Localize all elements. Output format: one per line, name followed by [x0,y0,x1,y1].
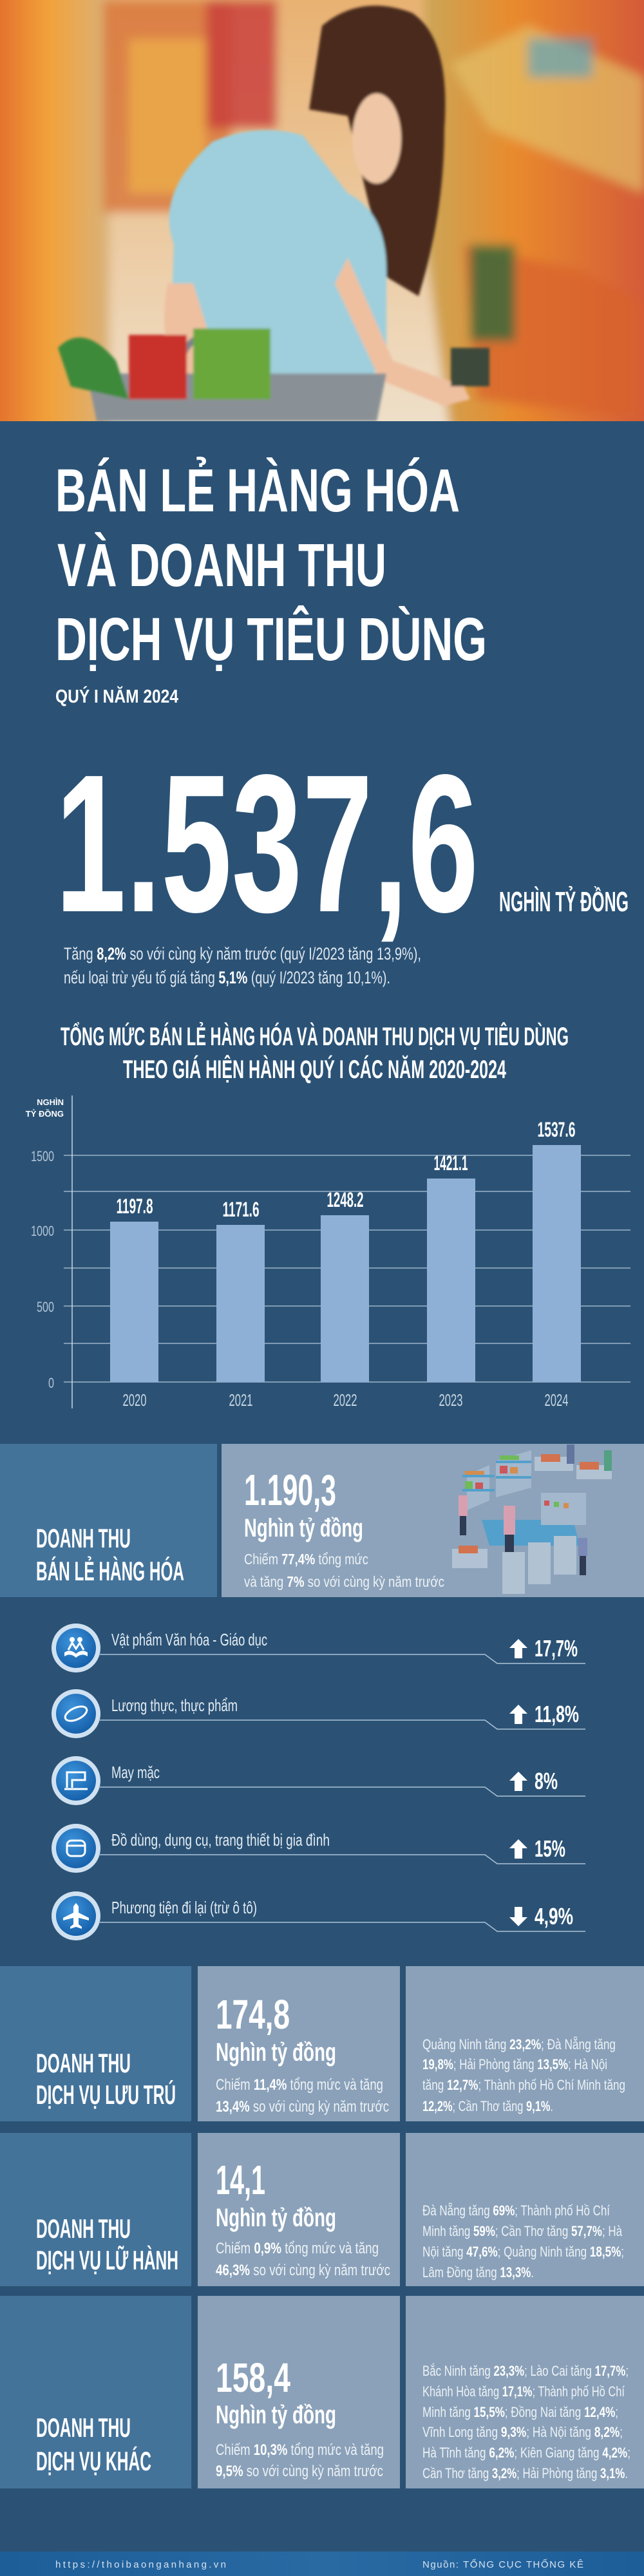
panel: accommodation services: DOANH THU [36,2048,131,2078]
y tick labels: 0 [48,1375,54,1391]
year labels: 2022 [334,1390,357,1410]
panel: retail header [0,1444,644,1597]
panel: accommodation services: 12,2%; Cần Thơ tăng 9,1%. [422,2098,553,2114]
panel: travel services: Nghìn tỷ đồng [216,2204,336,2232]
year labels: 2020 [122,1390,147,1410]
panel: travel services: Đà Nẵng tăng 69%; Thành phố Hồ Chí [422,2202,610,2219]
panel: accommodation services [0,1966,644,2121]
heading: retail [36,1523,184,1586]
item: food: Lương thực, thực phẩm [111,1696,238,1715]
panel: other services: Bắc Ninh tăng 23,3%; Lào Cai tăng 17,7%; [422,2363,629,2379]
y tick labels: 500 [37,1299,54,1315]
year labels [122,1390,568,1410]
list: retail categories [52,1624,585,1940]
item: household goods: 15% [535,1835,565,1862]
panel: accommodation services: 19,8%; Hải Phòng tăng 13,5%; Hà Nội [422,2056,607,2072]
y tick labels: 1000 [31,1223,54,1239]
panel: travel services [0,2133,644,2286]
panel: travel services: 46,3% so với cùng kỳ năm trước [216,2262,390,2279]
value labels: 1537.6 [537,1118,576,1141]
retail figure: và tăng 7% so với cùng kỳ năm trước [244,1573,444,1590]
y-axis unit: NGHÌN [37,1097,64,1107]
value labels: 1171.6 [223,1198,259,1221]
title: VÀ DOANH THU [57,531,386,600]
retail figure [244,1466,444,1590]
value labels: 1421.1 [434,1151,468,1175]
item: cultural & educational goods: Vật phẩm Văn hóa - Giáo dục [111,1630,267,1649]
year labels: 2021 [229,1390,252,1410]
panel: other services: Vĩnh Long tăng 9,3%; Hà Nội tăng 8,2%; [422,2424,623,2440]
dress [167,128,390,375]
retail figure: Chiếm 77,4% tổng mức [244,1551,368,1567]
panel: accommodation services: 13,4% so với cùng kỳ năm trước [216,2098,389,2116]
item: vehicles [52,1891,585,1940]
chart title [61,1021,569,1084]
panel: travel services: Minh tăng 59%; Cần Thơ tăng 57,7%; Hà [422,2223,623,2239]
y tick labels [31,1148,54,1391]
growth note: Tăng 8,2% so với cùng kỳ năm trước (quý I/2023 tăng 13,9%), [64,944,421,963]
panel: travel services: Nội tăng 47,6%; Quảng Ninh tăng 18,5%; [422,2244,624,2260]
item: food [52,1689,585,1738]
panel: other services: Minh tăng 15,5%; Đồng Nai tăng 12,4%; [422,2404,618,2420]
item: cultural & educational goods: 17,7% [535,1635,578,1662]
retail figure: Nghìn tỷ đồng [244,1514,363,1542]
y-axis unit [26,1097,64,1119]
panel: other services: Nghìn tỷ đồng [216,2401,336,2429]
panel: travel services: DOANH THU [36,2213,131,2244]
title: DỊCH VỤ TIÊU DÙNG [55,605,487,674]
growth note: nếu loại trừ yếu tố giá tăng 5,1% (quý I/2023 tăng 10,1%). [64,968,390,987]
heading: retail: BÁN LẺ HÀNG HÓA [36,1555,184,1586]
panel: accommodation services: Nghìn tỷ đồng [216,2038,336,2067]
panel: other services: DỊCH VỤ KHÁC [36,2446,151,2476]
retail figure: 1.190,3 [244,1466,336,1515]
panel: travel services: 14,1 [216,2157,265,2203]
panel: accommodation services: Chiếm 11,4% tổng mức và tăng [216,2076,383,2094]
value labels [116,1118,576,1221]
footer: Nguồn: TỔNG CỤC THỐNG KÊ [422,2559,583,2570]
hair [309,6,445,296]
face [352,93,401,184]
footer [0,2552,644,2576]
title [55,457,487,674]
year labels: 2023 [439,1390,462,1410]
item: clothing: May mặc [111,1763,160,1782]
y tick labels: 1500 [31,1148,54,1164]
y-axis unit: TỶ ĐỒNG [26,1109,64,1119]
value labels: 1197.8 [116,1195,153,1218]
item: clothing: 8% [535,1768,558,1794]
panel: other services [0,2296,644,2488]
panel: accommodation services: DỊCH VỤ LƯU TRÚ [36,2079,176,2110]
item: cultural & educational goods [52,1624,585,1672]
panel: other services: Hà Tĩnh tăng 6,2%; Kiên Giang tăng 4,2%; [422,2445,630,2461]
item: vehicles: 4,9% [535,1903,573,1929]
panel: accommodation services: Quảng Ninh tăng 23,2%; Đà Nẵng tăng [422,2036,616,2052]
bar chart [26,1095,630,1410]
panel: other services: Chiếm 10,3% tổng mức và tăng [216,2441,384,2459]
item: vehicles: Phương tiện đi lại (trừ ô tô) [111,1898,257,1917]
illustration: store [452,1444,612,1594]
item: clothing [52,1756,585,1805]
item: household goods: Đồ dùng, dụng cụ, trang thiết bị gia đình [111,1830,330,1850]
bars [110,1145,581,1382]
footer: https://thoibaonganhang.vn [55,2559,226,2570]
title: BÁN LẺ HÀNG HÓA [55,457,460,525]
panel: other services: DOANH THU [36,2412,131,2443]
subtitle: QUÝ I NĂM 2024 [55,685,178,707]
panel: other services: 158,4 [216,2354,290,2401]
heading: retail: DOANH THU [36,1523,131,1553]
photo: woman shopping in supermarket [0,0,644,438]
panel: travel services: DỊCH VỤ LỮ HÀNH [36,2244,178,2275]
panel: accommodation services: 174,8 [216,1991,290,2038]
panel: other services: Cần Thơ tăng 3,2%; Hải Phòng tăng 3,1%. [422,2465,628,2481]
panel: other services: 9,5% so với cùng kỳ năm trước [216,2463,383,2480]
panel: travel services: Chiếm 0,9% tổng mức và tăng [216,2240,379,2257]
value labels: 1248.2 [327,1188,363,1211]
item: household goods [52,1824,585,1873]
year labels: 2024 [545,1390,568,1410]
growth note [64,944,421,987]
panel: travel services: Lâm Đồng tăng 13,3%. [422,2264,534,2280]
item: food: 11,8% [535,1701,579,1727]
